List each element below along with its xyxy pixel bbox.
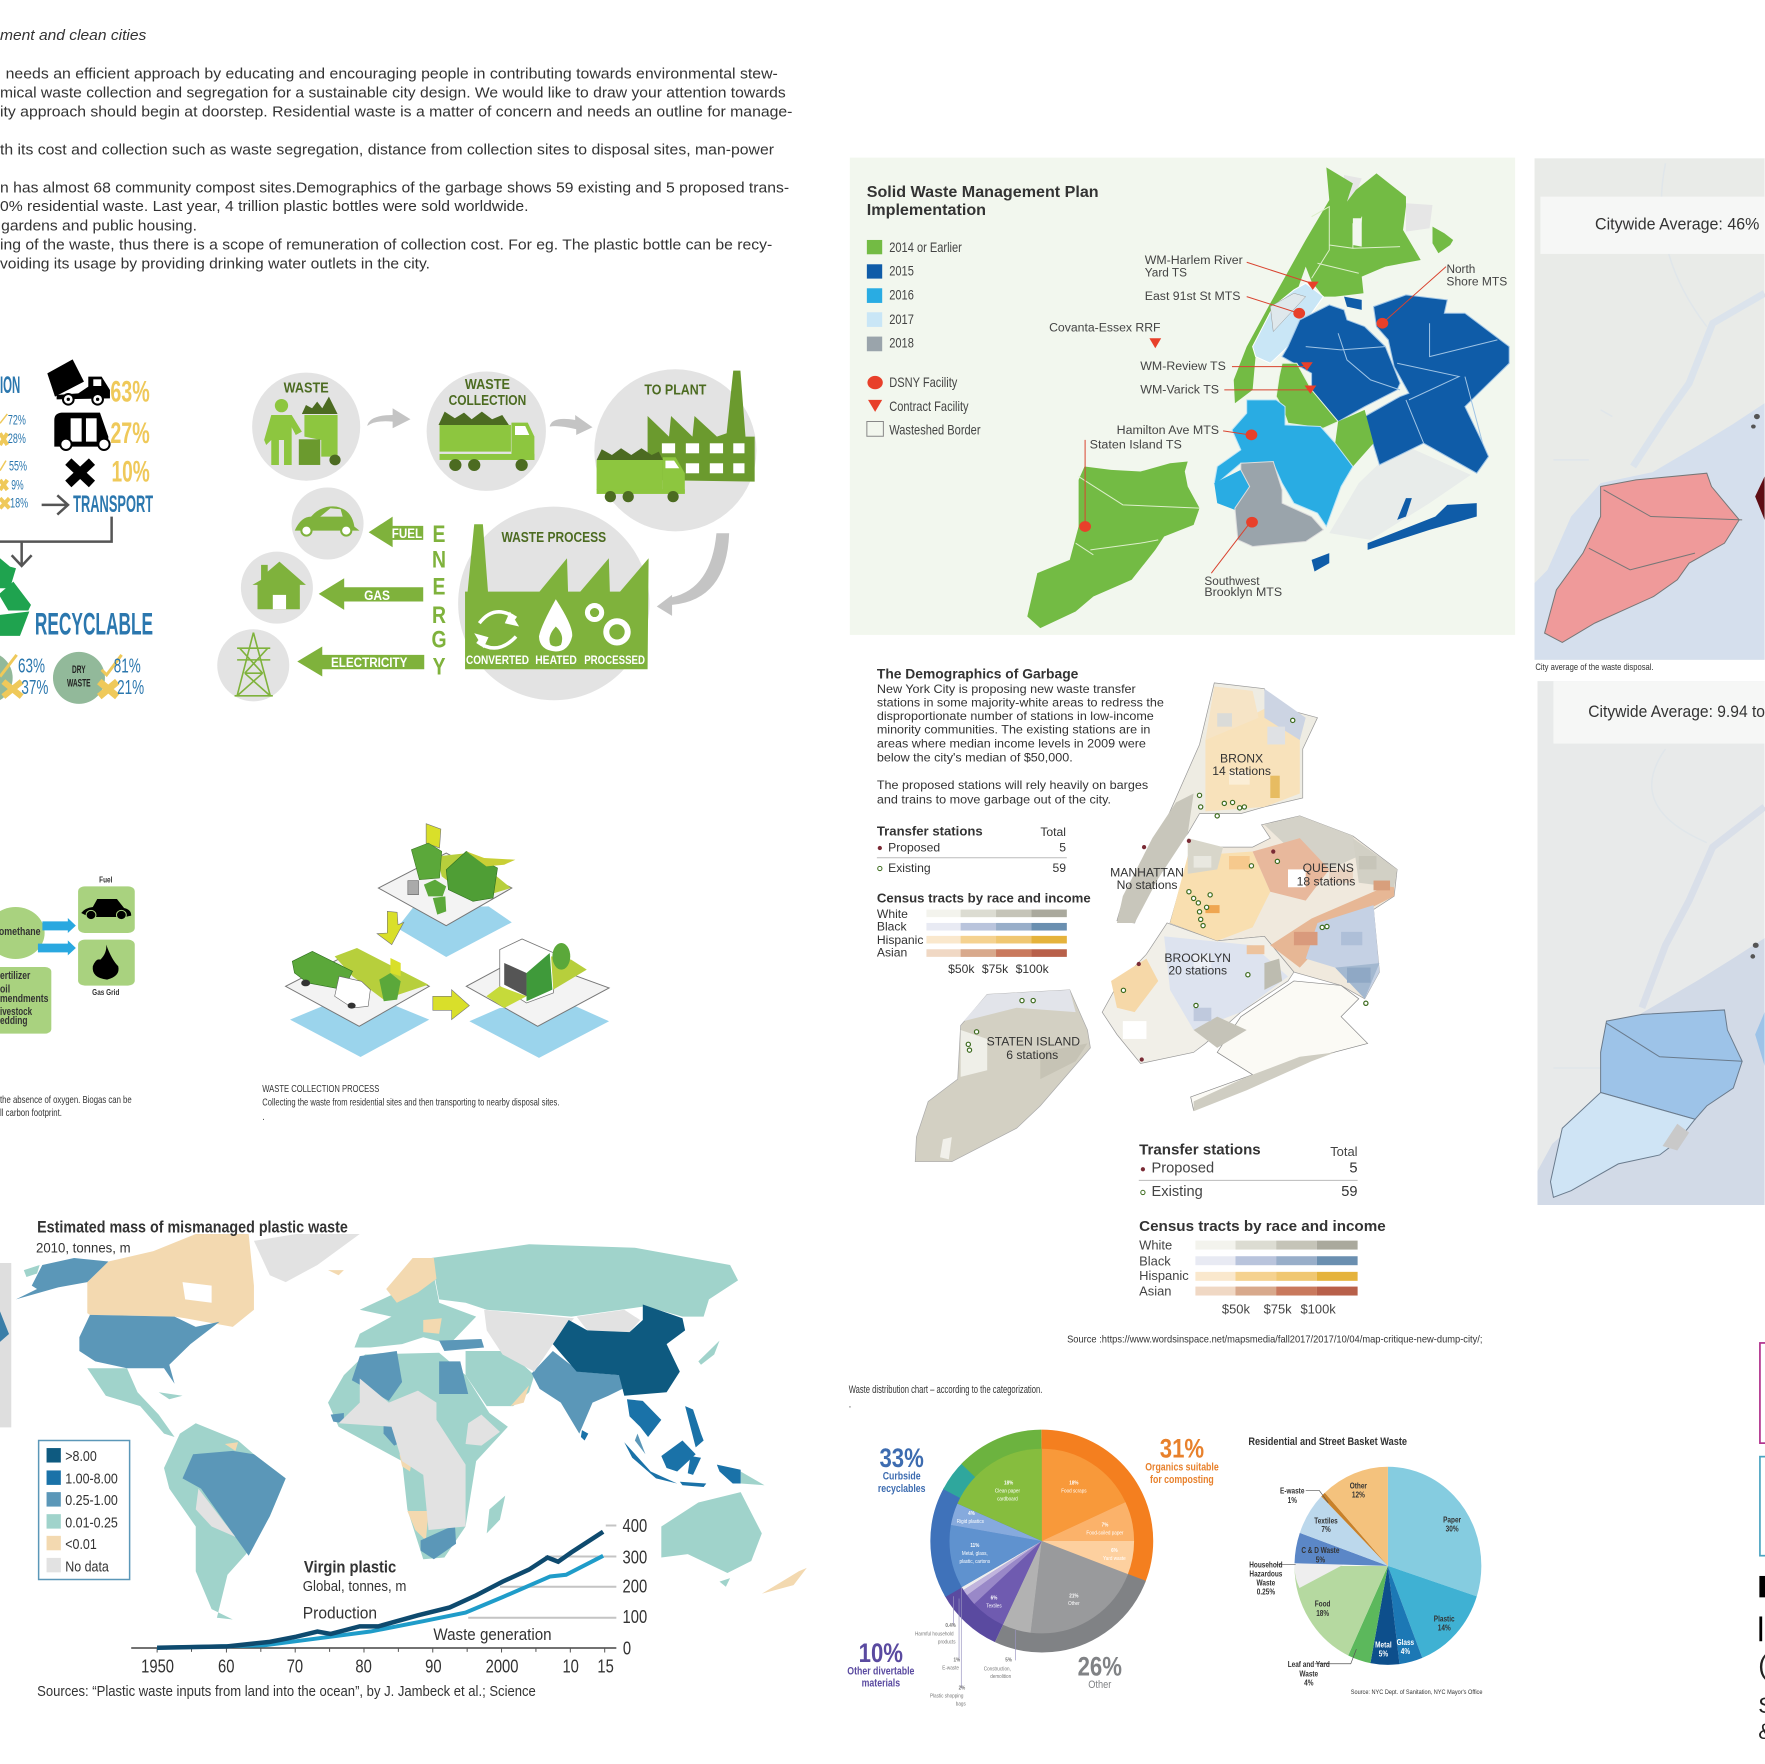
right pie labels: 0.25% (1257, 1587, 1276, 1597)
legend: transfer stations 2: $50k (1222, 1302, 1251, 1317)
legend: transfer stations 1: Proposed (888, 841, 940, 855)
cycle drawings (235, 371, 755, 696)
legend: transfer stations 1: Existing (888, 861, 931, 875)
labels: transport and recyclable percentages: 72% (8, 412, 26, 427)
labels: process steps: WASTE (465, 377, 510, 393)
labels: process steps: HEATED (535, 653, 577, 667)
text: demographics intro: minority communities. The existing stations are in (877, 722, 1150, 736)
chart labels: 100 (623, 1608, 647, 1627)
pie slice labels: 0.4% (945, 1623, 956, 1629)
legend labels: 2014 or Earlier (889, 240, 962, 255)
legend labels: 0.01-0.25 (65, 1513, 118, 1531)
chart labels: 90 (425, 1657, 442, 1677)
plastic line chart (131, 1526, 616, 1653)
text block: introduction (0, 28, 793, 273)
labels: biomethane (0, 875, 132, 1119)
labels: biomethane: ivestock (0, 1006, 32, 1018)
map: NYC boroughs by year (867, 167, 1509, 628)
pie slice labels: 4% (968, 1511, 975, 1517)
pie slice labels: 6% (991, 1595, 998, 1602)
panel: biomethane diagram (0, 875, 135, 1119)
chart labels: Global, tonnes, m (303, 1579, 406, 1595)
labels: transport and recyclable percentages: ION (0, 373, 20, 399)
text: demographics intro: The proposed stations will rely heavily on barges (877, 778, 1148, 792)
legend labels: DSNY Facility (889, 375, 958, 390)
pie slice labels: products (938, 1639, 956, 1646)
legend: transfer stations 2: $100k (1300, 1302, 1336, 1317)
source line: Source :https://www.wordsinspace.net/mapsmedia/fall2017/2017/10/04/map-critique-new-dump-city/; (1067, 1335, 1482, 1346)
right pie labels: 1% (1288, 1495, 1297, 1505)
pie slice labels: demolition (990, 1673, 1011, 1680)
legend: transfer stations 2: Total (1330, 1144, 1358, 1159)
right pie labels: Waste (1257, 1578, 1275, 1588)
labels: process steps: WASTE (284, 380, 329, 396)
legend: transfer stations 1: $50k (948, 962, 975, 976)
pie slice labels: Other (1068, 1601, 1080, 1607)
chart labels: 1950 (141, 1657, 174, 1677)
borough labels: STATEN ISLAND (987, 1034, 1080, 1048)
text block: introduction: ity approach should begin at doorstep. Residential waste is a matter of concern and needs an outline for manage- (0, 105, 793, 121)
labels: transport and recyclable percentages (0, 373, 153, 699)
icons: recycle, flame, gears (477, 612, 516, 648)
pie headline percentages: 33% (879, 1444, 924, 1474)
chart labels: 80 (355, 1657, 372, 1677)
legend labels (65, 1447, 118, 1575)
legend: transfer stations 2 (1139, 1142, 1386, 1317)
labels: transport and recyclable percentages: 9% (11, 477, 24, 492)
title: solid waste plan (867, 184, 1099, 219)
pie slice labels: Food-soiled paper (1086, 1530, 1124, 1536)
pie slice labels: Metal, glass, (962, 1551, 988, 1557)
legend labels: 1.00-8.00 (65, 1469, 118, 1487)
label: energy vertical: Y (433, 653, 446, 680)
caption: waste collection process: Collecting the waste from residential sites and then transporting to nearby disposal sites. (262, 1098, 559, 1109)
borough labels (987, 752, 1355, 1062)
icon: factory to plant (648, 371, 755, 482)
labels: transport and recyclable percentages: DRY (72, 664, 86, 676)
right pie labels: 4% (1401, 1646, 1411, 1656)
pie slice labels: 6% (1111, 1547, 1118, 1554)
borough labels: 6 stations (1006, 1048, 1058, 1062)
labels: process steps: TO PLANT (644, 383, 706, 399)
label: energy vertical: E (433, 520, 445, 547)
borough labels: BROOKLYN (1164, 951, 1231, 965)
factory: waste process (465, 524, 649, 669)
pie slice labels (915, 1480, 1126, 1708)
text block: introduction: th its cost and collection such as waste segregation, distance from collection sites to disposal sites, man-power (0, 142, 774, 158)
legend swatch grid 2 (1195, 1241, 1358, 1296)
labels: biomethane: the absence of oxygen. Biogas can be (0, 1095, 132, 1106)
legend: transfer stations 2: Hispanic (1139, 1268, 1189, 1283)
chart labels (141, 1517, 647, 1677)
labels: transport and recyclable percentages: 21% (117, 677, 144, 699)
pie slice labels: Construction, (984, 1666, 1011, 1673)
labels: biomethane: ll carbon footprint. (0, 1108, 62, 1119)
map heading: Estimated mass of mismanaged plastic waste (37, 1218, 348, 1237)
labels: process steps: ELECTRICITY (331, 655, 407, 670)
caption: waste distribution (849, 1384, 1042, 1411)
labels: process steps: COLLECTION (449, 393, 526, 409)
caption: waste collection process: . (262, 1111, 265, 1122)
pie slice labels: Rigid plastics (957, 1519, 984, 1525)
legend: transfer stations 1: Black (877, 919, 907, 933)
pie slice labels: 5% (1005, 1657, 1012, 1664)
heading: citywide average: Citywide Average: 46% (1595, 216, 1759, 234)
labels: biomethane: ertilizer (0, 970, 30, 982)
facility labels: WM-Harlem River (1145, 253, 1243, 267)
text block: introduction: 0% residential waste. Last year, 4 trillion plastic bottles were sold worldwide. (0, 199, 528, 215)
icon: house (252, 562, 306, 609)
labels: transport and recyclable percentages: 55% (9, 459, 27, 474)
labels: process steps: CONVERTED (466, 653, 529, 667)
legend: transfer stations 2: Proposed (1152, 1160, 1214, 1176)
caption: waste distribution: . (849, 1399, 851, 1411)
caption: waste collection process (262, 1084, 559, 1122)
pie slice labels: cardboard (997, 1496, 1018, 1503)
borough labels: 18 stations (1297, 874, 1355, 888)
pie headline percentages (847, 1435, 1219, 1691)
right pie labels: 5% (1316, 1555, 1326, 1565)
pie slice labels: 18% (1069, 1480, 1079, 1487)
pie slice labels: E-waste (942, 1665, 959, 1672)
pie headline percentages: Organics suitable (1145, 1462, 1219, 1474)
legend: transfer stations 2: 5 (1349, 1160, 1358, 1176)
box: teal outline (1760, 1457, 1765, 1556)
legend labels: 2018 (889, 336, 914, 351)
pie leader lines (953, 1587, 1015, 1689)
right pie leader lines (1275, 1490, 1356, 1664)
caption: city average: City average of the waste disposal. (1535, 662, 1654, 673)
legend labels (889, 240, 981, 438)
legend swatches (867, 240, 883, 436)
labels: process steps (284, 377, 706, 670)
right pie labels: 7% (1321, 1525, 1331, 1534)
arrows: fuel, gas, electricity (252, 506, 424, 677)
right pie labels: Source: NYC Dept. of Sanitation, NYC Mayor's Office (1351, 1689, 1483, 1696)
facility labels: Brooklyn MTS (1204, 585, 1282, 599)
pie slice labels: Yard waste (1103, 1556, 1126, 1562)
legend: transfer stations 1: Transfer stations (877, 823, 983, 838)
panel: transport and recyclable infographic (0, 359, 153, 704)
labels: transport and recyclable percentages: TRANSPORT (73, 492, 153, 518)
pie slice labels: 7% (1102, 1522, 1109, 1529)
legend: transfer stations 2: Asian (1139, 1284, 1172, 1299)
right pie labels: Waste (1299, 1669, 1318, 1679)
facility labels: Southwest (1204, 574, 1260, 588)
pie slice labels: 1% (954, 1657, 961, 1664)
legend labels: 2016 (889, 287, 914, 303)
facility labels: WM-Varick TS (1140, 383, 1219, 397)
caption: waste collection process: WASTE COLLECTION PROCESS (262, 1084, 380, 1095)
panel: waste to energy cycle (217, 369, 756, 701)
caption: waste distribution: Waste distribution chart – according to the categorization. (849, 1384, 1042, 1396)
panel: world map of mismanaged plastic waste (16, 1218, 807, 1700)
pie slice labels: Food scraps (1061, 1488, 1087, 1495)
text: demographics intro: areas where median income levels in 2009 were (877, 737, 1146, 751)
legend labels: <0.01 (65, 1535, 97, 1552)
icon: person with bin (264, 399, 338, 465)
pie chart: waste composition (986, 1485, 1097, 1597)
right pie labels: Hazardous (1249, 1569, 1282, 1579)
legend: transfer stations 1: 59 (1052, 861, 1066, 875)
text: demographics intro (877, 666, 1164, 806)
right pie labels: Residential and Street Basket Waste (1248, 1436, 1407, 1448)
labels: process steps: PROCESSED (584, 653, 645, 667)
icon: pylon (235, 633, 273, 696)
map heading (36, 1218, 348, 1255)
labels: biomethane: edding (0, 1015, 28, 1027)
pie slice labels: 11% (970, 1543, 980, 1549)
labels: transport and recyclable percentages: 37% (21, 677, 48, 699)
right pie labels: Paper (1443, 1515, 1461, 1525)
legend: transfer stations 2: Existing (1152, 1184, 1203, 1200)
title: solid waste plan: Solid Waste Management Plan (867, 184, 1099, 201)
chart labels: 10 (562, 1657, 579, 1677)
labels: biomethane: oil (0, 983, 10, 995)
world map (16, 1234, 807, 1653)
pie slice labels: Plastic shopping (930, 1693, 964, 1700)
labels: transport and recyclable percentages: 27% (110, 418, 150, 450)
legend: transfer stations 2: Transfer stations (1139, 1142, 1261, 1158)
legend: transfer stations 1: Census tracts by race and income (877, 890, 1091, 905)
labels: transport and recyclable percentages: 10% (111, 456, 150, 488)
pie headline percentages: Other (1088, 1679, 1112, 1691)
pie headline percentages: Other divertable (847, 1666, 915, 1678)
panel: demographics of garbage (877, 666, 1482, 1346)
legend: transfer stations 2: $75k (1264, 1302, 1292, 1317)
text block: introduction: mical waste collection and segregation for a sustainable city design. We would like to draw your attention towards (0, 85, 786, 101)
labels: transport and recyclable percentages: 63% (18, 655, 45, 677)
panel: citywide average 46 percent map (1535, 158, 1765, 673)
facility labels: Covanta-Essex RRF (1049, 321, 1161, 335)
image fragment at left edge (0, 1263, 11, 1427)
right pie labels: Leaf and Yard (1288, 1660, 1330, 1669)
pie slice labels: bags (956, 1701, 966, 1708)
panel: clipped boxes and text at right edge (1758, 1343, 1765, 1744)
legend: transfer stations 1: Asian (877, 945, 907, 959)
borough labels: 14 stations (1212, 764, 1271, 778)
text block: introduction: needs an efficient approach by educating and encouraging people in contributing towards environmental stew- (6, 66, 778, 82)
pie headline percentages: recyclables (878, 1483, 926, 1495)
legend: transfer stations 1: 5 (1059, 841, 1066, 855)
right pie labels (1248, 1436, 1483, 1696)
pie headline percentages: 26% (1078, 1652, 1122, 1682)
shapes: biomethane boxes and arrows (0, 886, 135, 1034)
facility labels (1049, 253, 1507, 599)
legend: transfer stations 1: Total (1040, 825, 1066, 839)
panel: citywide average tons map (1537, 681, 1765, 1205)
labels: biomethane: Gas Grid (92, 987, 119, 997)
right pie labels: Other (1350, 1481, 1367, 1491)
pie slice labels: Textiles (986, 1603, 1002, 1610)
legend: transfer stations 2: Black (1139, 1253, 1171, 1268)
pie slice labels: 2% (959, 1685, 966, 1692)
text block: introduction: ing of the waste, thus there is a scope of remuneration of collection cost. For eg. The plastic bottle can be recy- (0, 237, 772, 253)
legend: transfer stations 2: 59 (1341, 1184, 1358, 1200)
labels: process steps: FUEL (392, 526, 422, 541)
labels: transport and recyclable percentages: 18% (10, 496, 28, 511)
legend: transfer stations 1: $100k (1016, 962, 1050, 976)
right pie labels: 4% (1304, 1678, 1314, 1688)
right pie labels: C & D Waste (1301, 1545, 1339, 1555)
panel: isometric waste collection process (262, 824, 609, 1122)
legend labels: No data (65, 1557, 109, 1575)
facility labels: East 91st St MTS (1145, 289, 1241, 303)
right pie labels: Food (1315, 1599, 1330, 1609)
borough labels: BRONX (1220, 752, 1263, 766)
right pie labels: 12% (1352, 1490, 1365, 1500)
clipped text fragments (1758, 1576, 1765, 1744)
chart labels: 60 (218, 1657, 234, 1677)
labels: biomethane: mendments (0, 993, 48, 1005)
isometric drawing (286, 824, 609, 1058)
icon: car (295, 506, 359, 531)
legend labels: Contract Facility (889, 399, 969, 414)
legend labels: 2015 (889, 264, 914, 279)
legend swatch grid 1 (926, 910, 1067, 957)
text: demographics intro: below the city's median of $50,000. (877, 751, 1073, 765)
borough labels: 20 stations (1168, 963, 1227, 977)
arrows: grey flow (367, 408, 729, 616)
facility labels: North (1446, 262, 1475, 276)
text block: introduction: gardens and public housing. (1, 218, 197, 234)
label: energy vertical: E (433, 573, 445, 600)
pie headline percentages: for composting (1150, 1474, 1214, 1486)
labels: transport and recyclable percentages: 81% (114, 655, 141, 677)
legend labels: 0.25-1.00 (65, 1491, 118, 1508)
text: demographics intro: stations in some majority-white areas to redress the (877, 695, 1164, 709)
labels: process steps: GAS (364, 588, 390, 603)
right pie labels: Metal (1375, 1640, 1392, 1650)
legend: transfer stations 1: Hispanic (877, 933, 923, 947)
text: demographics intro: New York City is proposing new waste transfer (877, 682, 1136, 696)
grey circles (217, 369, 756, 701)
right pie labels: Textiles (1314, 1516, 1338, 1526)
box: magenta outline (1760, 1343, 1765, 1443)
labels: transport and recyclable percentages: 63% (110, 376, 150, 408)
facility labels: WM-Review TS (1140, 359, 1226, 373)
legend labels: Wasteshed Border (889, 422, 981, 438)
text: demographics intro: The Demographics of Garbage (877, 666, 1079, 681)
labels: biomethane: Fuel (99, 875, 112, 885)
legend: transfer stations 1: White (877, 907, 908, 921)
chart labels: 300 (623, 1548, 647, 1568)
chart labels: 2000 (486, 1657, 518, 1677)
chart labels: Waste generation (433, 1625, 552, 1644)
text block: introduction: n has almost 68 community compost sites.Demographics of the garbage shows 59 existing and 5 proposed trans- (0, 181, 789, 197)
label: energy vertical (431, 520, 447, 680)
borough labels: QUEENS (1303, 861, 1354, 875)
borough labels: No stations (1117, 878, 1177, 892)
text block: introduction: voiding its usage by providing drinking water outlets in the city. (0, 257, 430, 273)
legend: transfer stations 1: $75k (982, 962, 1009, 976)
tract mosaic patches (987, 713, 1390, 1039)
heading: italic subtitle: ment and clean cities (0, 28, 147, 44)
map heading: 2010, tonnes, m (36, 1239, 131, 1255)
pie headline percentages: materials (862, 1678, 901, 1690)
pie slice labels: Harmful household (915, 1631, 954, 1638)
facility labels: Yard TS (1145, 265, 1187, 279)
right pie labels: Glass (1397, 1637, 1414, 1647)
map: census tracts by race and income (877, 683, 1397, 1296)
basemap and staten island (1535, 158, 1765, 660)
borough labels: MANHATTAN (1110, 865, 1184, 879)
pie headline percentages: Curbside (883, 1471, 921, 1483)
label: energy vertical: N (432, 546, 446, 573)
labels: process steps: WASTE PROCESS (501, 530, 606, 546)
chart labels: 0 (623, 1639, 631, 1659)
text: demographics intro: and trains to move garbage out of the city. (877, 792, 1111, 806)
station dots (966, 718, 1368, 1052)
label: energy vertical: G (431, 626, 447, 653)
panel: solid waste management plan map (850, 158, 1515, 635)
chart labels: 400 (623, 1517, 647, 1536)
legend: transfer stations 2: Census tracts by race and income (1139, 1219, 1386, 1235)
labels: biomethane: omethane (0, 926, 41, 938)
labels: transport and recyclable percentages: 28% (8, 431, 26, 446)
right pie labels: Plastic (1434, 1614, 1455, 1624)
map sources: Sources: “Plastic waste inputs from land into the ocean”, by J. Jambeck et al.; Science (37, 1684, 536, 1700)
right pie labels: 5% (1379, 1649, 1389, 1659)
panel: waste distribution pie charts (847, 1384, 1483, 1708)
right pie labels: 30% (1446, 1524, 1459, 1534)
right pie labels: 18% (1316, 1608, 1330, 1618)
icons: truck, auto rickshaw, cross, recycle (0, 359, 122, 704)
legend labels: >8.00 (65, 1447, 97, 1464)
pie headline percentages: 31% (1160, 1435, 1204, 1464)
pie headline percentages: 10% (859, 1639, 903, 1668)
label: energy vertical: R (432, 601, 446, 628)
legend box (39, 1440, 130, 1580)
pie chart: residential and street basket waste (1341, 1516, 1435, 1615)
title: solid waste plan: Implementation (867, 202, 986, 219)
legend: transfer stations 1 (877, 823, 1091, 976)
basemap and staten island blue (1537, 681, 1765, 1205)
pie slice labels: 18% (1004, 1480, 1014, 1487)
facility markers and leader lines (1085, 262, 1446, 573)
labels: transport and recyclable percentages: RECYCLABLE (35, 606, 153, 642)
pie slice labels: plastic, cartons (960, 1559, 991, 1565)
facility labels: Shore MTS (1446, 274, 1507, 288)
pie slice labels: Clean paper (995, 1488, 1020, 1495)
facility labels: Staten Island TS (1090, 438, 1182, 452)
chart labels: 70 (287, 1657, 303, 1677)
labels: transport and recyclable percentages: WASTE (67, 677, 91, 689)
right pie labels: E-waste (1280, 1486, 1304, 1496)
text: demographics intro: disproportionate number of stations in low-income (877, 709, 1154, 723)
pie slice labels: 21% (1069, 1593, 1079, 1599)
facility labels: Hamilton Ave MTS (1117, 423, 1219, 437)
right pie labels: Household (1249, 1560, 1283, 1570)
icon: collection truck (440, 425, 511, 452)
legend: transfer stations 2: White (1139, 1238, 1172, 1253)
chart labels: Production (303, 1604, 377, 1623)
legend labels: 2017 (889, 312, 914, 327)
chart labels: 15 (597, 1657, 614, 1677)
right pie labels: 14% (1438, 1623, 1451, 1633)
chart labels: 200 (623, 1577, 647, 1597)
chart labels: Virgin plastic (304, 1557, 396, 1576)
